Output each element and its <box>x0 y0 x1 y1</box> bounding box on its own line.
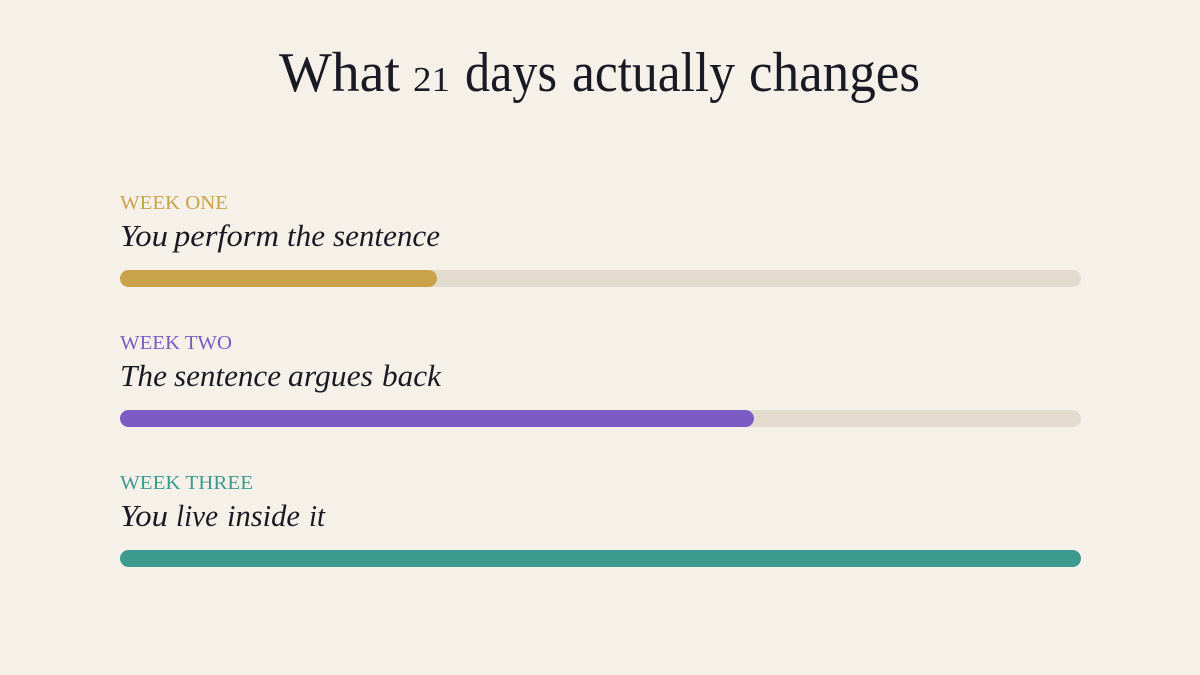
panel: week one <box>120 193 1081 287</box>
panel: week two <box>120 333 1081 427</box>
week two label: WEEK TWO <box>120 333 232 354</box>
week three progress bar <box>120 550 1081 567</box>
title: changes <box>749 42 920 104</box>
week three heading: inside <box>227 499 300 533</box>
week two heading: argues <box>288 359 373 393</box>
week one heading: sentence <box>333 219 440 253</box>
week one heading: perform <box>172 219 279 253</box>
title: days <box>465 42 557 104</box>
week one heading: the <box>287 219 325 253</box>
title: 21 <box>413 60 450 99</box>
title: What <box>279 42 400 104</box>
week one heading: You <box>120 219 168 253</box>
week one progress bar <box>120 270 1081 287</box>
week three heading: it <box>309 499 326 533</box>
week two progress bar <box>120 410 1081 427</box>
week one label: WEEK ONE <box>120 193 228 214</box>
title: actually <box>572 42 735 104</box>
panel: week three <box>120 473 1081 567</box>
week three heading: You <box>120 499 168 533</box>
week two heading: back <box>382 359 441 393</box>
week two heading: The <box>120 359 167 393</box>
week two heading: sentence <box>174 359 281 393</box>
week three label: WEEK THREE <box>120 473 253 494</box>
week three heading: live <box>176 499 218 533</box>
